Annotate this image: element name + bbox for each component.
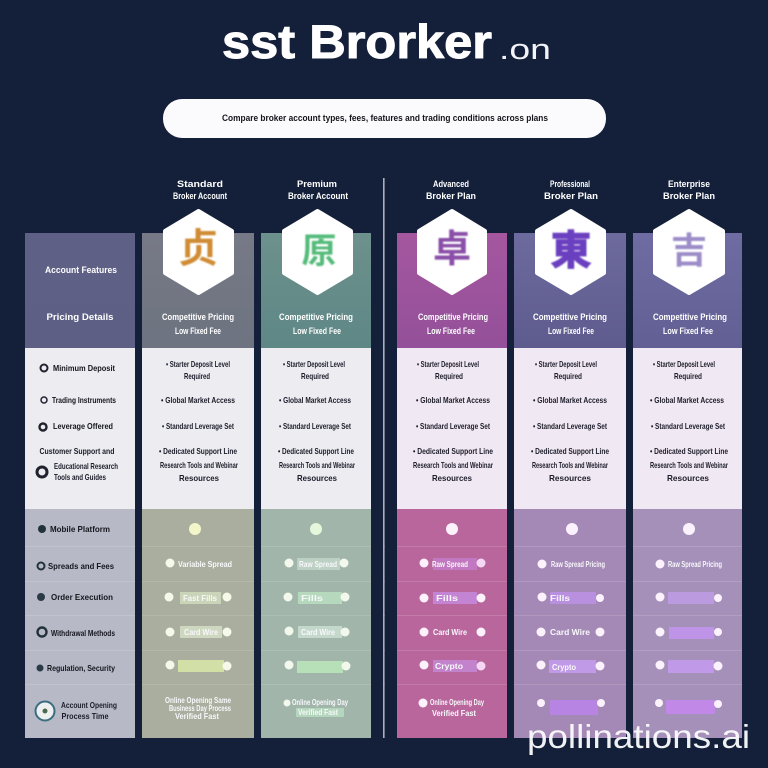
column 2 comparison rows bbox=[284, 523, 350, 717]
column 1 comparison rows: Online Opening Same bbox=[165, 696, 231, 705]
column 4 feature rows: • Global Market Access bbox=[533, 395, 607, 405]
icon: column 1 hexagon bbox=[165, 211, 232, 293]
column 1 feature rows: • Starter Deposit Level bbox=[166, 359, 230, 369]
column 3 comparison rows: Card Wire bbox=[433, 628, 467, 637]
column 2 pricing text bbox=[279, 312, 353, 336]
column 5 pricing text: Competitive Pricing bbox=[653, 312, 727, 322]
subtitle pill bbox=[163, 99, 606, 138]
column 2 pricing text: Low Fixed Fee bbox=[293, 326, 341, 336]
column 3 pricing text: Low Fixed Fee bbox=[427, 326, 475, 336]
column 2 feature rows: Required bbox=[301, 371, 329, 381]
column 1 feature rows: • Standard Leverage Set bbox=[162, 421, 234, 431]
column 1 pricing text: Low Fixed Fee bbox=[175, 326, 221, 336]
icon: column 4 hexagon bbox=[537, 211, 604, 293]
column 3 comparison rows: Online Opening Day bbox=[430, 698, 484, 707]
column 1 heading: Broker Account bbox=[173, 191, 227, 201]
column 2 pricing text: Competitive Pricing bbox=[279, 312, 353, 322]
column 4 heading bbox=[544, 179, 598, 201]
column 2 heading: Broker Account bbox=[288, 191, 348, 201]
column 4 feature rows: • Dedicated Support Line bbox=[531, 446, 609, 456]
label column feature rows bbox=[37, 363, 118, 482]
column 5 feature rows: • Standard Leverage Set bbox=[651, 421, 725, 431]
icon: column 2 hexagon: 原 bbox=[301, 232, 337, 271]
icon: column 3 hexagon bbox=[419, 211, 485, 293]
column 3 comparison rows bbox=[418, 523, 486, 718]
column 3 feature rows: Research Tools and Webinar bbox=[413, 460, 493, 470]
panel: column 4 bbox=[514, 179, 626, 738]
column 1 pricing text: Competitive Pricing bbox=[162, 312, 234, 322]
column 5 pricing text bbox=[653, 312, 727, 336]
panel: column 1 bbox=[142, 179, 254, 738]
column 4 comparison rows: Card Wire bbox=[550, 628, 591, 637]
icon: column 3 hexagon: 卓 bbox=[433, 229, 471, 271]
column 1 feature rows: • Global Market Access bbox=[161, 395, 235, 405]
column 2 feature rows: Research Tools and Webinar bbox=[279, 460, 355, 470]
column 1 feature rows: Required bbox=[184, 371, 210, 381]
panel: column 2 bbox=[261, 179, 371, 738]
column 3 heading: Advanced bbox=[433, 179, 469, 189]
column 4 comparison rows: Crypto bbox=[552, 663, 576, 672]
label column comparison rows: Account Opening bbox=[61, 700, 117, 710]
title: sst Brorker bbox=[222, 15, 492, 68]
column 2 comparison rows: Fills bbox=[301, 594, 324, 603]
column 4 pricing text bbox=[533, 312, 607, 336]
column 5 feature rows: Required bbox=[674, 371, 702, 381]
label column feature rows: Educational Research bbox=[54, 461, 118, 471]
label column feature rows: Customer Support and bbox=[40, 446, 114, 456]
column 2 feature rows: • Global Market Access bbox=[279, 395, 351, 405]
column 4 comparison rows: Raw Spread Pricing bbox=[551, 560, 605, 569]
column 1 comparison rows: Fast Fills bbox=[183, 594, 218, 603]
column 2 heading: Premium bbox=[297, 179, 337, 189]
icon: column 4 hexagon: 東 bbox=[551, 229, 591, 273]
column 5 feature rows: • Starter Deposit Level bbox=[653, 359, 715, 369]
column 2 comparison rows: Card Wire bbox=[301, 628, 335, 637]
column 3 feature rows: • Starter Deposit Level bbox=[417, 359, 479, 369]
column 1 feature rows: Research Tools and Webinar bbox=[160, 460, 238, 470]
column 4 pricing text: Competitive Pricing bbox=[533, 312, 607, 322]
column 5 heading bbox=[663, 179, 715, 201]
icon: column 1 hexagon: 贞 bbox=[178, 227, 218, 271]
label column heading text: Pricing Details bbox=[46, 312, 114, 322]
panel: column 3 bbox=[397, 179, 507, 738]
column 4 pricing text: Low Fixed Fee bbox=[548, 326, 594, 336]
column 3 pricing text bbox=[418, 312, 488, 336]
center divider bbox=[383, 178, 385, 738]
label column feature rows: Minimum Deposit bbox=[53, 363, 115, 373]
column 1 comparison rows: Verified Fast bbox=[175, 712, 219, 721]
watermark: pollinations.ai bbox=[527, 718, 750, 755]
label column comparison rows bbox=[36, 524, 117, 721]
column 1 feature rows: Resources bbox=[179, 473, 219, 483]
column 3 feature rows bbox=[413, 359, 493, 483]
column 1 feature rows: • Dedicated Support Line bbox=[159, 446, 237, 456]
column 3 comparison rows: Verified Fast bbox=[432, 709, 476, 718]
label column comparison rows: Order Execution bbox=[51, 592, 113, 602]
column 5 heading: Broker Plan bbox=[663, 191, 715, 201]
label column feature rows: Leverage Offered bbox=[53, 421, 113, 431]
column 5 feature rows: • Dedicated Support Line bbox=[650, 446, 728, 456]
column 5 feature rows: • Global Market Access bbox=[650, 395, 724, 405]
column 5 comparison rows: Raw Spread Pricing bbox=[668, 560, 722, 569]
label column comparison rows: Regulation, Security bbox=[47, 663, 115, 673]
column 2 comparison rows: Verified Fast bbox=[298, 708, 338, 717]
column 5 pricing text: Low Fixed Fee bbox=[663, 326, 713, 336]
column 3 feature rows: Required bbox=[435, 371, 463, 381]
label column comparison rows: Spreads and Fees bbox=[48, 561, 114, 571]
panel: label column bbox=[25, 233, 135, 738]
column 1 feature rows bbox=[159, 359, 238, 483]
column 4 feature rows: Required bbox=[554, 371, 582, 381]
label column heading text: Account Features bbox=[45, 265, 117, 275]
column 5 feature rows: Resources bbox=[667, 473, 709, 483]
column 2 comparison rows: Raw Spread bbox=[299, 560, 337, 569]
column 4 heading: Professional bbox=[550, 179, 590, 189]
column 5 feature rows: Research Tools and Webinar bbox=[650, 460, 728, 470]
column 3 heading bbox=[426, 179, 476, 201]
column 2 feature rows: • Dedicated Support Line bbox=[278, 446, 354, 456]
column 1 comparison rows: Business Day Process bbox=[169, 704, 231, 713]
column 1 heading bbox=[173, 179, 227, 201]
column 5 heading: Enterprise bbox=[668, 179, 710, 189]
column 2 heading bbox=[288, 179, 348, 201]
column 3 pricing text: Competitive Pricing bbox=[418, 312, 488, 322]
icon: column 2 hexagon bbox=[284, 211, 351, 293]
column 4 comparison rows bbox=[536, 523, 605, 715]
column 2 feature rows bbox=[278, 359, 355, 483]
column 3 comparison rows: Raw Spread bbox=[432, 560, 468, 569]
column 1 comparison rows bbox=[164, 523, 232, 721]
column 4 heading: Broker Plan bbox=[544, 191, 598, 201]
icon: column 5 hexagon bbox=[655, 211, 723, 293]
column 3 feature rows: • Standard Leverage Set bbox=[416, 421, 490, 431]
column 1 heading: Standard bbox=[177, 179, 223, 189]
column 1 comparison rows: Card Wire bbox=[184, 628, 218, 637]
label column feature rows: Trading Instruments bbox=[52, 395, 116, 405]
column 3 feature rows: • Dedicated Support Line bbox=[413, 446, 493, 456]
column 1 comparison rows: Variable Spread bbox=[178, 560, 232, 569]
label column comparison rows: Withdrawal Methods bbox=[51, 628, 115, 638]
label column comparison rows: Process Time bbox=[62, 711, 109, 721]
column 2 comparison rows: Online Opening Day bbox=[292, 698, 348, 707]
label column feature rows: Tools and Guides bbox=[54, 472, 106, 482]
column 4 comparison rows: Fills bbox=[550, 594, 571, 603]
label column comparison rows: Mobile Platform bbox=[50, 524, 110, 534]
column 3 feature rows: • Global Market Access bbox=[416, 395, 490, 405]
panel: column 5 bbox=[633, 179, 742, 738]
icon: column 5 hexagon: 吉 bbox=[671, 230, 707, 271]
column 1 pricing text bbox=[162, 312, 234, 336]
label column heading text bbox=[45, 265, 117, 322]
subtitle pill: Compare broker account types, fees, features and trading conditions across plans bbox=[222, 113, 548, 123]
column 4 feature rows: Resources bbox=[549, 473, 591, 483]
column 2 feature rows: • Standard Leverage Set bbox=[279, 421, 351, 431]
column 3 comparison rows: Crypto bbox=[435, 662, 463, 671]
column 5 comparison rows bbox=[655, 523, 722, 714]
column 3 heading: Broker Plan bbox=[426, 191, 476, 201]
column 3 comparison rows: Fills bbox=[436, 594, 459, 603]
column 2 feature rows: • Starter Deposit Level bbox=[283, 359, 345, 369]
column 4 feature rows bbox=[531, 359, 609, 483]
column 4 feature rows: Research Tools and Webinar bbox=[532, 460, 608, 470]
column 5 feature rows bbox=[650, 359, 728, 483]
column 4 feature rows: • Standard Leverage Set bbox=[533, 421, 607, 431]
column 3 feature rows: Resources bbox=[432, 473, 472, 483]
column 2 feature rows: Resources bbox=[297, 473, 337, 483]
column 4 feature rows: • Starter Deposit Level bbox=[535, 359, 597, 369]
title: .on bbox=[499, 34, 551, 66]
